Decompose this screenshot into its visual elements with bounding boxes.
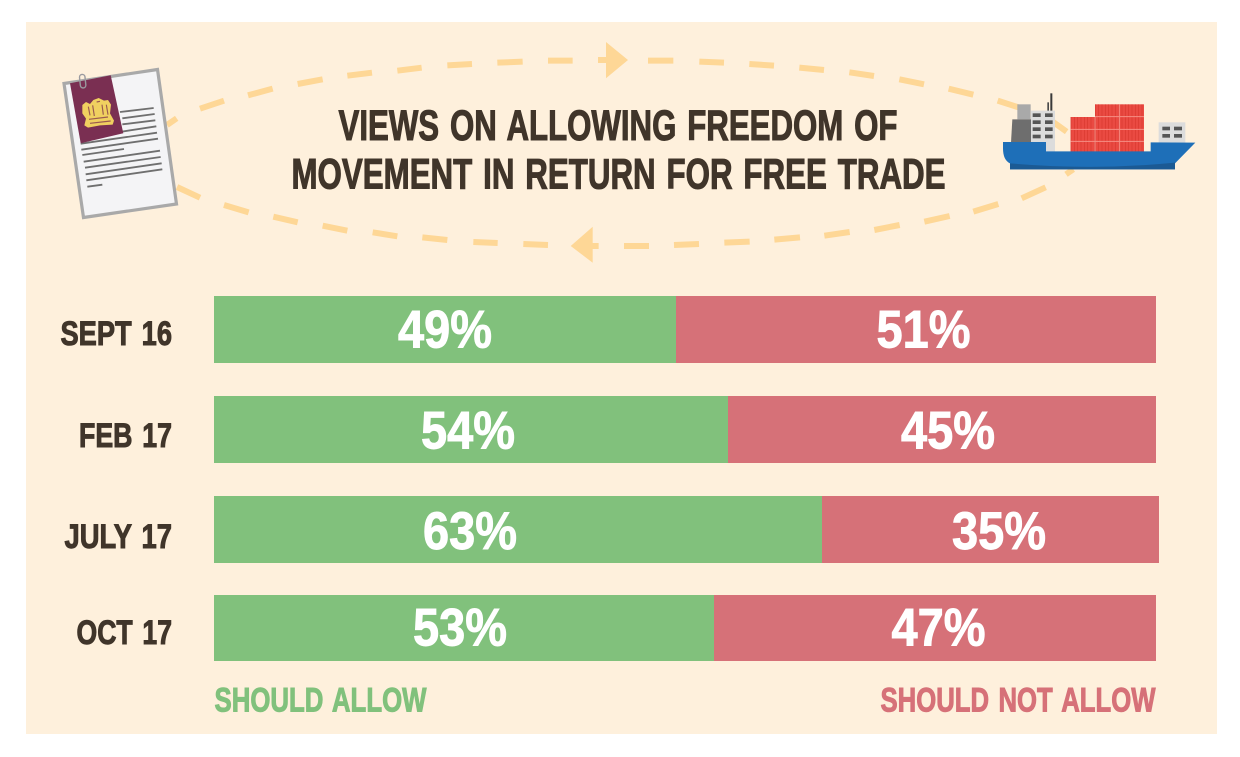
legend: should not allow: SHOULD NOT ALLOW bbox=[880, 682, 1156, 720]
arrow: bottom dashed path from ship to document bbox=[177, 169, 1073, 263]
value 49%: 49% bbox=[398, 301, 492, 360]
title: MOVEMENT IN RETURN FOR FREE TRADE bbox=[292, 150, 946, 198]
legend: should allow: SHOULD ALLOW bbox=[214, 682, 427, 720]
icon: container ship bbox=[1003, 93, 1195, 169]
title bbox=[292, 102, 946, 198]
row label: FEB 17 bbox=[79, 417, 172, 455]
value 47%: 47% bbox=[892, 599, 986, 658]
bar: should not allow 51% bbox=[676, 296, 1156, 363]
bar row: Oct 17 bbox=[76, 595, 1156, 661]
icon: document with passport bbox=[64, 70, 176, 218]
bar: should allow 63% bbox=[214, 496, 822, 563]
bar: should not allow 45% bbox=[728, 396, 1156, 463]
bar: should allow 49% bbox=[214, 296, 676, 363]
value 54%: 54% bbox=[421, 401, 515, 460]
bar: should not allow 35% bbox=[822, 496, 1159, 563]
value 63%: 63% bbox=[423, 502, 517, 561]
bar row: July 17 bbox=[64, 496, 1159, 563]
bar: should not allow 47% bbox=[714, 595, 1156, 661]
arrow: top dashed path from document to ship bbox=[167, 42, 1067, 132]
bar: should allow 54% bbox=[214, 396, 728, 463]
title: VIEWS ON ALLOWING FREEDOM OF bbox=[338, 102, 898, 150]
row label: JULY 17 bbox=[64, 518, 172, 556]
bar row: Feb 17 bbox=[79, 396, 1156, 463]
bar: should allow 53% bbox=[214, 595, 714, 661]
row label: SEPT 16 bbox=[60, 315, 172, 353]
bar row: Sept 16 bbox=[60, 296, 1156, 363]
value 51%: 51% bbox=[876, 301, 970, 360]
value 45%: 45% bbox=[901, 401, 995, 460]
value 35%: 35% bbox=[952, 502, 1046, 561]
row label: OCT 17 bbox=[76, 614, 172, 652]
value 53%: 53% bbox=[413, 599, 507, 658]
